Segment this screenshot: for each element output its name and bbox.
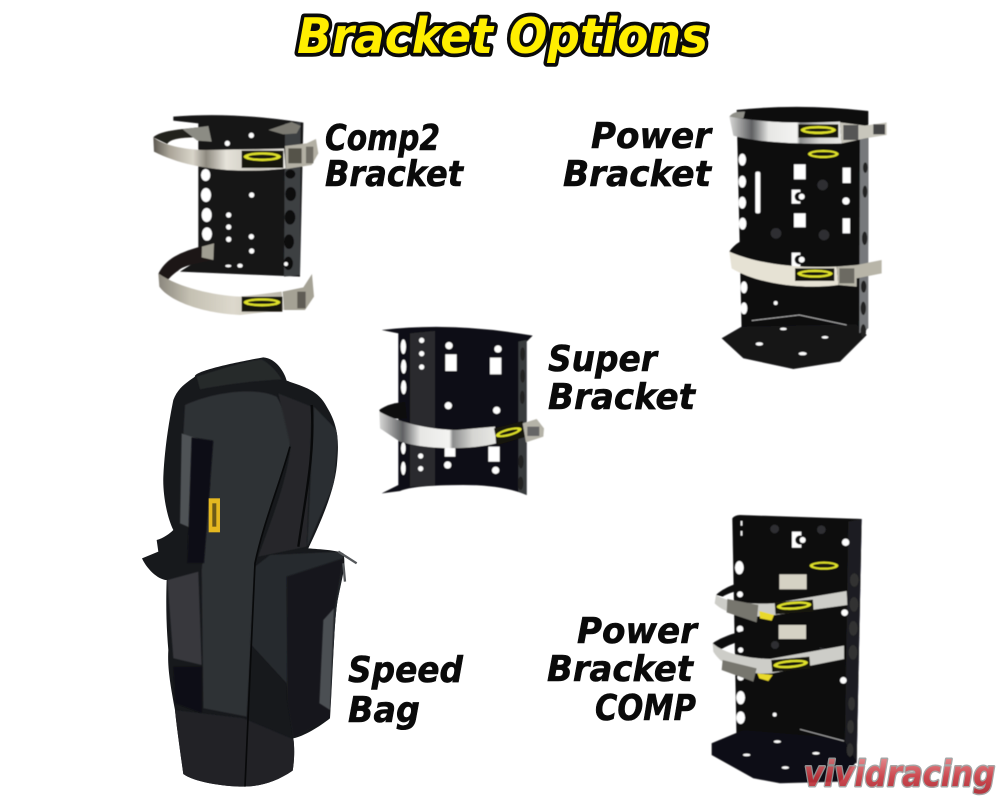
top strap — [153, 122, 318, 171]
base plate — [722, 324, 867, 369]
body holes — [735, 521, 859, 769]
lower band — [173, 710, 295, 790]
label: Comp2 Bracket: Bracket — [325, 154, 465, 195]
buckle — [285, 139, 318, 169]
front panel — [183, 391, 290, 717]
label: Comp2 Bracket: Comp2 — [325, 118, 440, 159]
body holes — [739, 154, 868, 355]
bottom strap — [158, 243, 314, 315]
label: Power Bracket — [563, 116, 713, 195]
bottom strap — [729, 238, 882, 287]
panel: Power bracket — [722, 107, 887, 369]
panel: Super bracket — [379, 327, 544, 495]
right pocket — [250, 552, 343, 738]
panel: Speed bag — [142, 357, 357, 790]
top strap — [729, 112, 887, 144]
label: Power Bracket COMP: COMP — [595, 688, 696, 729]
zip pull — [338, 552, 357, 582]
back grey patch — [180, 433, 197, 528]
shaded panels — [167, 359, 343, 790]
label: Power Bracket COMP: Power — [577, 611, 699, 652]
base plate — [712, 730, 857, 783]
label: Speed Bag: Bag — [348, 690, 420, 731]
lower strap — [713, 625, 845, 682]
panel: Comp2 bracket — [153, 115, 318, 315]
title: Bracket Options — [297, 8, 708, 65]
side rail — [859, 135, 868, 333]
label: Power Bracket COMP — [547, 611, 699, 729]
mesh pocket — [287, 558, 343, 738]
buckle — [283, 274, 314, 310]
label: Power Bracket COMP: Bracket — [547, 649, 695, 690]
bag silhouette — [142, 357, 344, 787]
label: Speed Bag: Speed — [348, 650, 464, 691]
label: Speed Bag — [348, 650, 464, 731]
logo on plate — [808, 150, 839, 158]
label: Power Bracket: Bracket — [563, 154, 713, 195]
side rail — [845, 519, 862, 762]
body holes — [401, 338, 525, 490]
logo badge — [242, 297, 282, 312]
left pocket — [167, 572, 202, 665]
left rail — [410, 331, 435, 487]
label: Super Bracket: Super — [548, 339, 659, 380]
label: Super Bracket: Bracket — [548, 377, 697, 418]
bracket body — [737, 107, 868, 332]
label: Super Bracket — [548, 339, 697, 418]
zip line — [298, 405, 312, 547]
yellow tag — [209, 498, 220, 532]
plate holes — [201, 133, 296, 270]
bracket body — [732, 515, 862, 763]
right rail — [518, 340, 527, 495]
label: Comp2 Bracket — [325, 118, 465, 195]
seam — [245, 447, 290, 787]
upper side panel — [258, 393, 312, 557]
strap — [173, 667, 202, 713]
side rail — [284, 123, 301, 277]
bracket body — [382, 327, 533, 495]
dark strip — [187, 437, 213, 563]
bracket plate — [173, 115, 303, 277]
label: Power Bracket: Power — [591, 116, 713, 157]
handle — [197, 359, 282, 389]
strap — [379, 402, 544, 448]
logo badge — [242, 151, 283, 168]
panel: Power bracket comp — [712, 515, 862, 783]
logo on plate — [810, 562, 838, 570]
upper strap — [715, 574, 847, 622]
